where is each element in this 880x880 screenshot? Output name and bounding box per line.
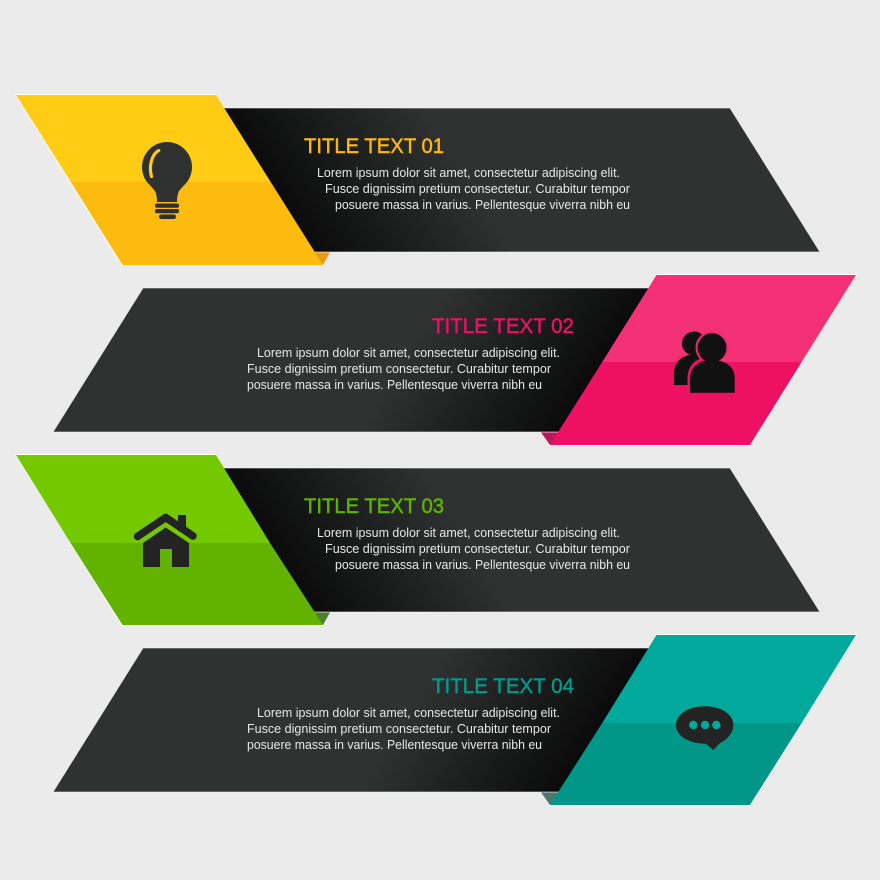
dark banner 4 <box>53 648 670 792</box>
fold 2 <box>541 432 560 445</box>
fold 3 <box>314 612 330 625</box>
body text 3: posuere massa in varius. Pellentesque viverra nibh eu <box>335 558 630 572</box>
body text 4: posuere massa in varius. Pellentesque viverra nibh eu <box>247 738 542 752</box>
icon: speech bubble <box>676 706 733 750</box>
title 3: TITLE TEXT 03 <box>304 495 444 518</box>
body text 1: posuere massa in varius. Pellentesque viverra nibh eu <box>335 198 630 212</box>
body text 3: Lorem ipsum dolor sit amet, consectetur adipiscing elit. <box>317 526 620 540</box>
fold 4 <box>541 792 560 805</box>
dark banner 3 <box>200 468 820 612</box>
body text 4 <box>247 706 560 752</box>
panel: row 3 <box>16 454 820 626</box>
panel: row 2 <box>53 274 856 446</box>
icon: house <box>138 515 193 567</box>
title 1: TITLE TEXT 01 <box>304 135 444 158</box>
panel: row 4 <box>53 634 856 806</box>
icon: people <box>674 331 735 393</box>
dark banner 1 <box>200 108 820 252</box>
body text 2 <box>247 346 560 392</box>
body text 2: Fusce dignissim pretium consectetur. Curabitur tempor <box>247 362 551 376</box>
colour block 3 <box>16 454 323 626</box>
colour block 4 <box>550 634 856 806</box>
title 4: TITLE TEXT 04 <box>432 675 574 698</box>
body text 1 <box>317 166 630 212</box>
colour block 2 <box>550 274 856 446</box>
panel: row 1 <box>16 94 820 265</box>
body text 2: posuere massa in varius. Pellentesque viverra nibh eu <box>247 378 542 392</box>
body text 4: Lorem ipsum dolor sit amet, consectetur adipiscing elit. <box>257 706 560 720</box>
body text 4: Fusce dignissim pretium consectetur. Curabitur tempor <box>247 722 551 736</box>
body text 3 <box>317 526 630 572</box>
fold 1 <box>314 252 330 265</box>
body text 3: Fusce dignissim pretium consectetur. Curabitur tempor <box>325 542 630 556</box>
body text 1: Fusce dignissim pretium consectetur. Curabitur tempor <box>325 182 630 196</box>
icon: light bulb <box>142 142 192 219</box>
colour block 1 <box>16 94 323 265</box>
title 2: TITLE TEXT 02 <box>432 315 574 338</box>
body text 2: Lorem ipsum dolor sit amet, consectetur adipiscing elit. <box>257 346 560 360</box>
body text 1: Lorem ipsum dolor sit amet, consectetur adipiscing elit. <box>317 166 620 180</box>
dark banner 2 <box>53 288 670 432</box>
